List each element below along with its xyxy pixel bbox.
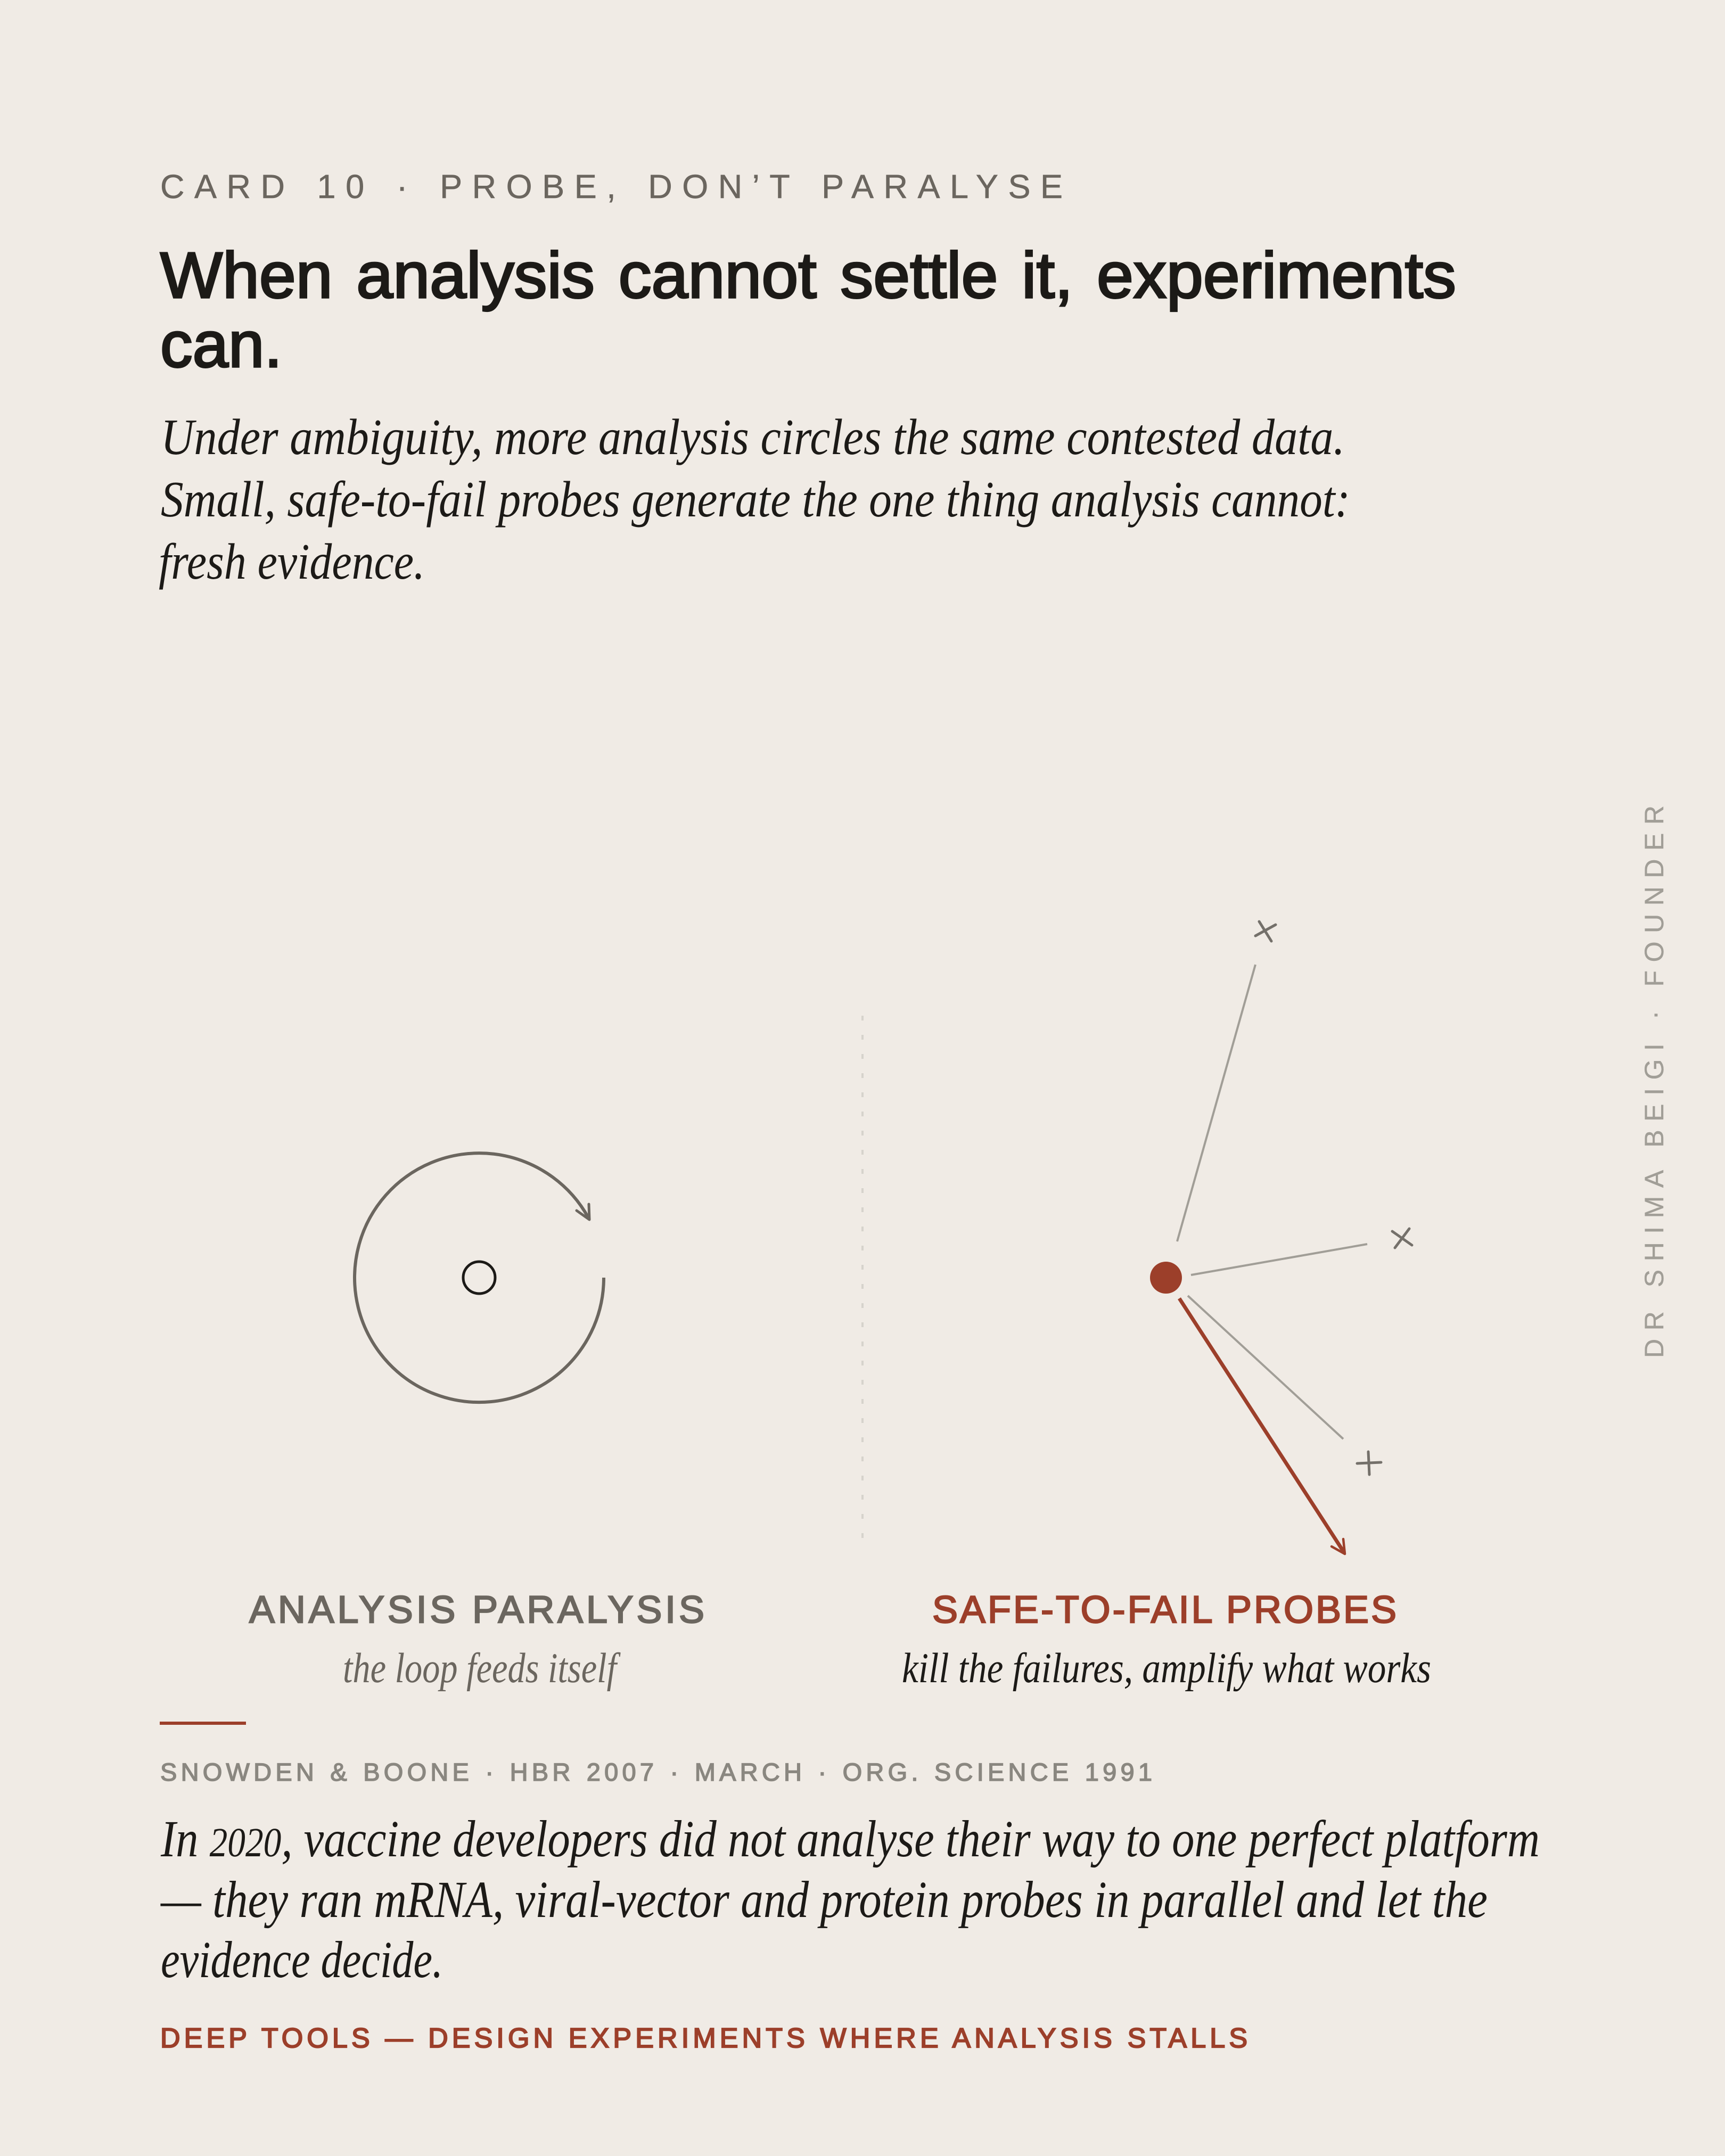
amplified probe arrow [1179, 1298, 1345, 1554]
quote: vaccine example [160, 1811, 1540, 1989]
quote: vaccine example: evidence decide. [161, 1931, 443, 1989]
caption: the loop feeds itself: the loop feeds itself [343, 1645, 621, 1692]
subtitle: Small, safe-to-fail probes generate the one thing analysis cannot: [161, 471, 1350, 528]
title: When analysis cannot settle it, experiments [160, 239, 1456, 311]
vertical author credit: DR SHIMA BEIGI · FOUNDER [1639, 805, 1669, 1358]
icon: centre circle [463, 1262, 495, 1294]
icon: failed probe mark top [1255, 921, 1276, 941]
title [160, 239, 1456, 381]
divider [861, 1016, 864, 1538]
label: safe-to-fail probes [902, 1589, 1431, 1692]
icon: circular loop arrow [355, 1153, 604, 1402]
panel: safe-to-fail probes diagram [1150, 921, 1412, 1554]
eyebrow: card label: CARD 10 · PROBE, DON’T PARALYSE [160, 168, 1063, 205]
label: analysis paralysis: ANALYSIS PARALYSIS [249, 1589, 704, 1631]
accent rule [160, 1722, 246, 1725]
label: safe-to-fail probes: SAFE-TO-FAIL PROBES [932, 1589, 1397, 1631]
quote: vaccine example: — they ran mRNA, viral-vector and protein probes in parallel and let the [160, 1871, 1488, 1929]
icon: failed probe mark right [1392, 1229, 1412, 1248]
subtitle [159, 408, 1350, 590]
subtitle: Under ambiguity, more analysis circles the same contested data. [161, 408, 1345, 465]
closing call to action: DEEP TOOLS — DESIGN EXPERIMENTS WHERE ANALYSIS STALLS [160, 2023, 1247, 2054]
label: analysis paralysis [249, 1589, 704, 1692]
caption: kill the failures: kill the failures, amplify what works [902, 1645, 1431, 1692]
subtitle: fresh evidence. [159, 533, 425, 590]
icon: positive probe mark [1357, 1452, 1381, 1475]
quote: vaccine example: In 2020, vaccine developers did not analyse their way to one perfect platform [160, 1811, 1540, 1868]
title: can. [160, 308, 282, 381]
panel: analysis paralysis loop [355, 1153, 604, 1402]
citation line: SNOWDEN & BOONE · HBR 2007 · MARCH · ORG. SCIENCE 1991 [160, 1758, 1152, 1786]
probe lines [1177, 965, 1367, 1439]
origin dot [1150, 1262, 1182, 1294]
